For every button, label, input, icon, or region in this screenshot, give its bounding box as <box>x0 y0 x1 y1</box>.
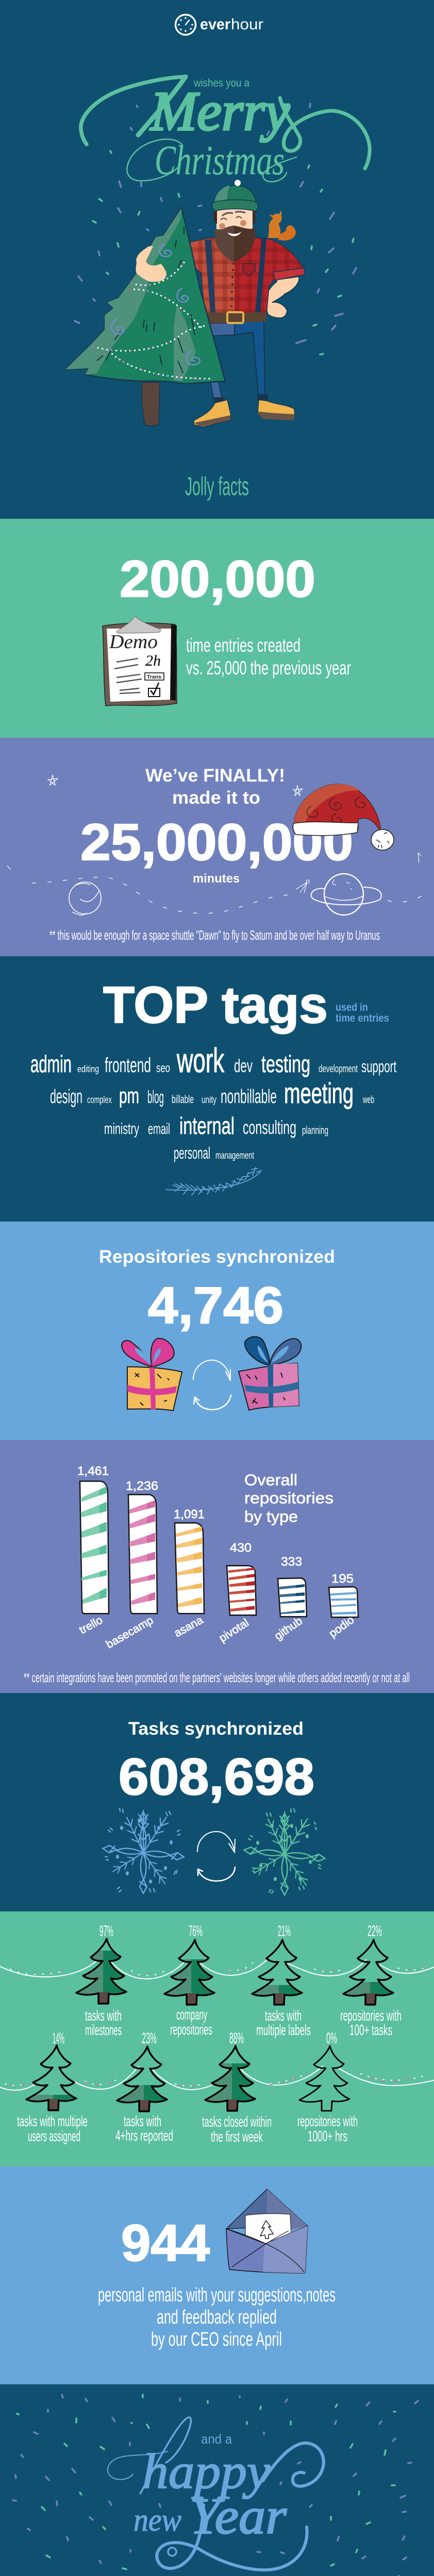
stat: 21% tasks with multiple labels: 21% <box>278 1923 291 1940</box>
bar: github <box>272 1555 307 1642</box>
subheading: used in time entries: used in <box>336 1002 368 1013</box>
bar: trello: trello <box>77 1613 105 1636</box>
bar: github: github <box>272 1614 305 1642</box>
heading: repositories synchronized: Repositories synchronized <box>99 1247 335 1267</box>
stat: 21% tasks with multiple labels <box>251 1925 310 2038</box>
icon: green snowflake <box>244 1809 325 1895</box>
bar: basecamp: 1,236 <box>126 1479 158 1493</box>
text: email caption: by our CEO since April <box>151 2329 282 2350</box>
text: email caption: and feedback replied <box>157 2307 277 2328</box>
belt <box>205 312 266 324</box>
stat: 22% repositories with 100+ tasks: 100+ tasks <box>349 2022 392 2039</box>
label: minutes: minutes <box>193 872 240 886</box>
stat: 0% repositories with 1000+ hrs <box>297 2030 358 2145</box>
number: 4,746: 4,746 <box>148 1277 283 1334</box>
stat: 0% repositories with 1000+ hrs: 1000+ hrs <box>308 2128 347 2145</box>
garland: bottom row <box>0 2066 434 2090</box>
word cloud: tags: pm <box>119 1083 139 1108</box>
bar: podio: podio <box>326 1613 356 1640</box>
stat: 22% repositories with 100+ tasks: 22% <box>368 1923 382 1940</box>
word cloud: tags: editing <box>77 1064 99 1074</box>
word cloud: tags: billable <box>172 1093 194 1106</box>
number: 25,000,000: 25,000,000 <box>80 814 353 871</box>
bar: pivotal: 430 <box>230 1541 252 1555</box>
bar: github: 333 <box>281 1555 302 1569</box>
squirrel <box>268 210 296 241</box>
word cloud: tags: unity <box>202 1095 216 1106</box>
heading: we have finally made it to: made it to <box>172 788 260 808</box>
word cloud: tags: personal <box>174 1144 210 1162</box>
stat: 88% tasks closed within the first week <box>199 2030 272 2145</box>
panel: happy new year <box>0 2384 434 2576</box>
stat: 22% repositories with 100+ tasks <box>341 1925 401 2035</box>
icon: santa hat <box>293 784 394 850</box>
word cloud: tags: web <box>362 1094 374 1106</box>
stat: 97% tasks with milestones <box>75 1925 127 2035</box>
word cloud: tags: complex <box>87 1095 112 1106</box>
word cloud: tags: frontend <box>105 1054 151 1077</box>
word cloud: tags: planning <box>302 1125 328 1137</box>
stat: 88% tasks closed within the first week: the first week <box>211 2129 263 2145</box>
panel: tasks synchronized <box>0 1693 434 1911</box>
word cloud: tags: support <box>361 1057 396 1076</box>
shirt <box>190 238 305 314</box>
word cloud: tags: blog <box>147 1088 164 1107</box>
heading: overall repositories by type: Overall <box>244 1471 297 1489</box>
stat: 21% tasks with multiple labels: multiple labels <box>256 2022 311 2039</box>
heading: top tags: TOP tags <box>103 976 328 1034</box>
stat: 23% tasks with 4+hrs reported: 23% <box>142 2030 157 2047</box>
boots <box>194 394 295 427</box>
word cloud: tags: consulting <box>243 1117 296 1138</box>
text: email caption <box>98 2284 336 2350</box>
word cloud: tags: ministry <box>104 1120 139 1138</box>
heading: we have finally made it to <box>145 766 285 808</box>
logo: everhour: ever <box>200 16 230 33</box>
stat: 14% tasks with multiple users assigned <box>17 2030 88 2145</box>
smile and cheeks <box>219 212 246 236</box>
panel: personal emails <box>0 2166 434 2384</box>
word cloud: tags: design <box>50 1086 82 1108</box>
stat: 21% tasks with multiple labels: tasks with <box>265 2008 302 2024</box>
number: 608,698: 608,698 <box>119 1748 314 1806</box>
word cloud: tags: admin <box>30 1050 72 1077</box>
heading: tasks synchronized: Tasks synchronized <box>128 1719 304 1739</box>
bar: asana: asana <box>172 1613 206 1639</box>
icon: clipboard: Demo <box>109 631 158 653</box>
panel: minutes <box>0 738 434 956</box>
bar: basecamp <box>104 1479 158 1651</box>
heading: and a happy new year lettering: happy <box>142 2444 270 2499</box>
illustration: lumberjack with tree <box>65 180 305 427</box>
beard <box>214 226 256 262</box>
word cloud: tags: management <box>215 1150 254 1161</box>
text: jolly facts: Jolly facts <box>185 472 249 501</box>
icon: pine sprig <box>166 1167 261 1195</box>
word cloud: tags: development <box>319 1063 358 1075</box>
garland: top row <box>0 1959 434 1979</box>
number: 944: 944 <box>121 2214 210 2272</box>
decoration: space doodles <box>7 775 425 915</box>
bar: pivotal <box>216 1541 256 1645</box>
panel: repositories synchronized <box>0 1222 434 1440</box>
word cloud: tags: work <box>176 1041 225 1079</box>
panel: header <box>0 0 434 519</box>
panel: time entries <box>0 519 434 738</box>
forearm and hand <box>266 277 299 318</box>
icon: clipboard <box>103 616 177 706</box>
subheading: used in time entries: time entries <box>336 1012 389 1024</box>
stat: 97% tasks with milestones: tasks with <box>85 2008 122 2024</box>
icon: sync arrows <box>197 1832 235 1881</box>
icon: blue snowflake <box>103 1808 184 1893</box>
tree <box>65 207 225 426</box>
word cloud: tags: meeting <box>284 1077 354 1109</box>
stat: 88% tasks closed within the first week: 88% <box>229 2030 244 2047</box>
stat: 14% tasks with multiple users assigned: users assigned <box>28 2128 80 2145</box>
icon: envelope <box>226 2189 308 2273</box>
stat: 14% tasks with multiple users assigned: 14% <box>53 2030 64 2047</box>
heading: we have finally made it to: We’ve FINALLY! <box>145 766 285 786</box>
confetti: footer <box>13 2395 418 2576</box>
hair sides <box>214 209 256 225</box>
hand on tree <box>136 246 166 282</box>
logo: everhour <box>175 14 263 35</box>
word cloud: tags <box>30 1041 396 1162</box>
panel: top tags <box>0 956 434 1222</box>
stat: 76% company repositories: repositories <box>170 2022 212 2038</box>
icon: pink gift <box>239 1336 301 1410</box>
heading: and a happy new year lettering: Year <box>190 2487 287 2545</box>
icon: sync arrows <box>193 1360 231 1410</box>
bar: basecamp: basecamp <box>104 1614 155 1651</box>
stat: 97% tasks with milestones: 97% <box>99 1923 113 1940</box>
logo: everhour: hour <box>231 16 263 33</box>
panel: repositories by type <box>0 1440 434 1693</box>
word cloud: tags: testing <box>261 1050 310 1077</box>
bar: trello: 1,461 <box>77 1464 109 1478</box>
bar: asana: 1,091 <box>174 1507 205 1521</box>
heading: merry christmas lettering <box>81 77 370 183</box>
bar: trello <box>77 1464 109 1636</box>
bar: podio <box>326 1572 358 1640</box>
heading: and a happy new year lettering: and a <box>201 2431 232 2447</box>
word cloud: tags: internal <box>179 1112 235 1139</box>
number: 200,000: 200,000 <box>120 550 315 608</box>
heading: overall repositories by type <box>244 1471 333 1526</box>
word cloud: tags: dev <box>234 1055 253 1076</box>
text: time entries caption: vs. 25,000 the previous year <box>186 657 351 679</box>
heading: overall repositories by type: by type <box>244 1507 298 1526</box>
heading: and a happy new year lettering: new <box>133 2503 181 2538</box>
heading: merry christmas lettering: Christmas <box>155 138 285 183</box>
heading: and a happy new year lettering <box>108 2417 324 2570</box>
bar: asana <box>172 1507 206 1639</box>
jeans <box>205 321 265 400</box>
text: time entries caption <box>186 635 351 679</box>
stat: 14% tasks with multiple users assigned: tasks with multiple <box>17 2113 88 2130</box>
stat: 76% company repositories <box>163 1925 215 2038</box>
heading: merry christmas lettering: Merry <box>149 81 290 142</box>
stat: 23% tasks with 4+hrs reported: 4+hrs reported <box>115 2128 173 2144</box>
heading: merry christmas lettering: wishes you a <box>193 77 249 89</box>
stat: 97% tasks with milestones: milestones <box>85 2022 122 2039</box>
bar: podio: 195 <box>331 1572 354 1586</box>
stat: 0% repositories with 1000+ hrs: 0% <box>326 2030 337 2047</box>
word cloud: tags: email <box>148 1121 170 1138</box>
stat: 0% repositories with 1000+ hrs: repositories with <box>297 2113 358 2130</box>
icon: clipboard: 2h <box>145 652 161 669</box>
hat <box>212 180 258 211</box>
bar chart: repositories by type <box>77 1464 358 1651</box>
heading: overall repositories by type: repositories <box>244 1489 333 1507</box>
word cloud: tags: nonbillable <box>221 1086 277 1108</box>
stat: 76% company repositories: company <box>176 2007 207 2023</box>
panel: task stats <box>0 1911 434 2166</box>
word cloud: tags: seo <box>156 1061 170 1075</box>
stat: 76% company repositories: 76% <box>189 1923 203 1940</box>
confetti: header <box>75 104 356 354</box>
icon: yellow gift <box>122 1338 182 1411</box>
stat: 23% tasks with 4+hrs reported: tasks with <box>124 2113 161 2130</box>
stat: 23% tasks with 4+hrs reported <box>115 2032 173 2144</box>
text: time entries caption: time entries created <box>186 635 301 656</box>
head <box>216 209 253 229</box>
subheading: used in time entries <box>336 1002 389 1024</box>
stat: 88% tasks closed within the first week: tasks closed within <box>202 2114 272 2130</box>
icon: clipboard: Trans <box>147 674 161 680</box>
bar: pivotal: pivotal <box>216 1616 251 1645</box>
